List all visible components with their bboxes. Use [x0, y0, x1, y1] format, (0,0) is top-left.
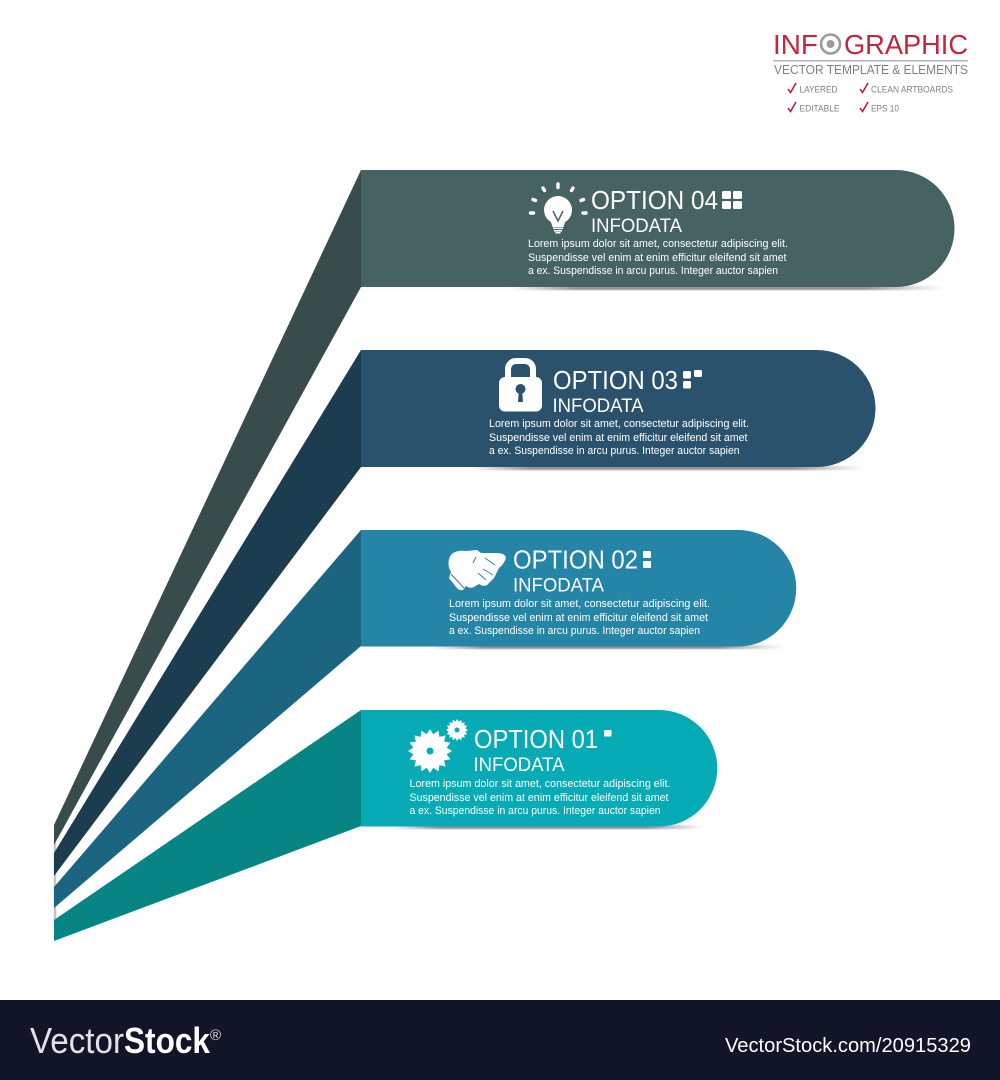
ribbon: option 02 [54, 530, 361, 908]
heading: option 04: OPTION 04 [591, 185, 718, 215]
icon: handshake [448, 550, 506, 590]
subheading: infodata 03: INFODATA [552, 395, 644, 417]
body text 02: Suspendisse vel enim at enim efficitur eleifend sit amet [449, 612, 708, 624]
bar 02 [361, 530, 796, 646]
body text 04 [528, 238, 788, 277]
body text 03: a ex. Suspendisse in arcu purus. Integer auctor sapien [489, 445, 740, 457]
footer logo: Vector [30, 1020, 124, 1061]
level squares 03 [683, 370, 702, 388]
header logo block [773, 29, 968, 114]
body text 04: Suspendisse vel enim at enim efficitur eleifend sit amet [528, 252, 787, 264]
body text 02 [449, 598, 710, 637]
panel: option 04 [361, 170, 955, 290]
footer image id: VectorStock.com/20915329 [725, 1035, 971, 1057]
footer logo: Stock [124, 1020, 211, 1061]
logo subtitle: VECTOR TEMPLATE & ELEMENTS [774, 63, 968, 77]
footer logo: ® [210, 1027, 221, 1044]
level squares 02 [643, 551, 651, 568]
icon: gears [408, 719, 468, 773]
body text 01 [410, 778, 670, 817]
subheading: infodata 04: INFODATA [591, 215, 682, 237]
bar 04 [361, 170, 955, 287]
feature checklist [788, 83, 953, 114]
ribbon: option 01 [54, 710, 361, 941]
panel: option 02 [361, 530, 796, 649]
logo word: INFOGRAPHIC: INF [773, 29, 818, 60]
body text 04: a ex. Suspendisse in arcu purus. Integer auctor sapien [528, 265, 778, 277]
feature checklist: EPS 10 [871, 104, 899, 114]
icon: padlock [499, 361, 542, 412]
bar 01 [361, 710, 717, 826]
level squares 04 [722, 191, 742, 209]
body text 03: Lorem ipsum dolor sit amet, consectetur adipiscing elit. [489, 418, 749, 430]
body text 04: Lorem ipsum dolor sit amet, consectetur adipiscing elit. [528, 238, 788, 250]
heading: option 02: OPTION 02 [513, 544, 638, 574]
heading: option 03: OPTION 03 [553, 365, 678, 395]
logo word: INFOGRAPHIC: GRAPHIC [844, 29, 968, 60]
body text 01: a ex. Suspendisse in arcu purus. Integer auctor sapien [410, 805, 661, 817]
footer logo [30, 1020, 221, 1061]
panel: option 01 [361, 710, 717, 829]
body text 03 [489, 418, 749, 457]
subheading: infodata 02: INFODATA [513, 574, 604, 596]
body text 03: Suspendisse vel enim at enim efficitur eleifend sit amet [489, 432, 748, 444]
footer band [0, 1000, 1000, 1080]
bar 03 [361, 350, 876, 467]
subheading: infodata 01: INFODATA [474, 754, 564, 776]
icon: light bulb [530, 184, 586, 234]
feature checklist: LAYERED [800, 84, 838, 94]
body text 02: a ex. Suspendisse in arcu purus. Integer auctor sapien [449, 625, 700, 637]
ribbon: option 04 [54, 170, 361, 845]
feature checklist: CLEAN ARTBOARDS [871, 84, 953, 94]
heading: option 01: OPTION 01 [474, 724, 598, 754]
body text 01: Suspendisse vel enim at enim efficitur eleifend sit amet [410, 792, 669, 804]
feature checklist: EDITABLE [800, 104, 840, 114]
body text 02: Lorem ipsum dolor sit amet, consectetur adipiscing elit. [449, 598, 710, 610]
body text 01: Lorem ipsum dolor sit amet, consectetur adipiscing elit. [410, 778, 670, 790]
panel: option 03 [361, 350, 876, 470]
ribbon: option 03 [54, 350, 361, 876]
level square 01 [604, 730, 612, 736]
logo word: INFOGRAPHIC [773, 29, 968, 60]
